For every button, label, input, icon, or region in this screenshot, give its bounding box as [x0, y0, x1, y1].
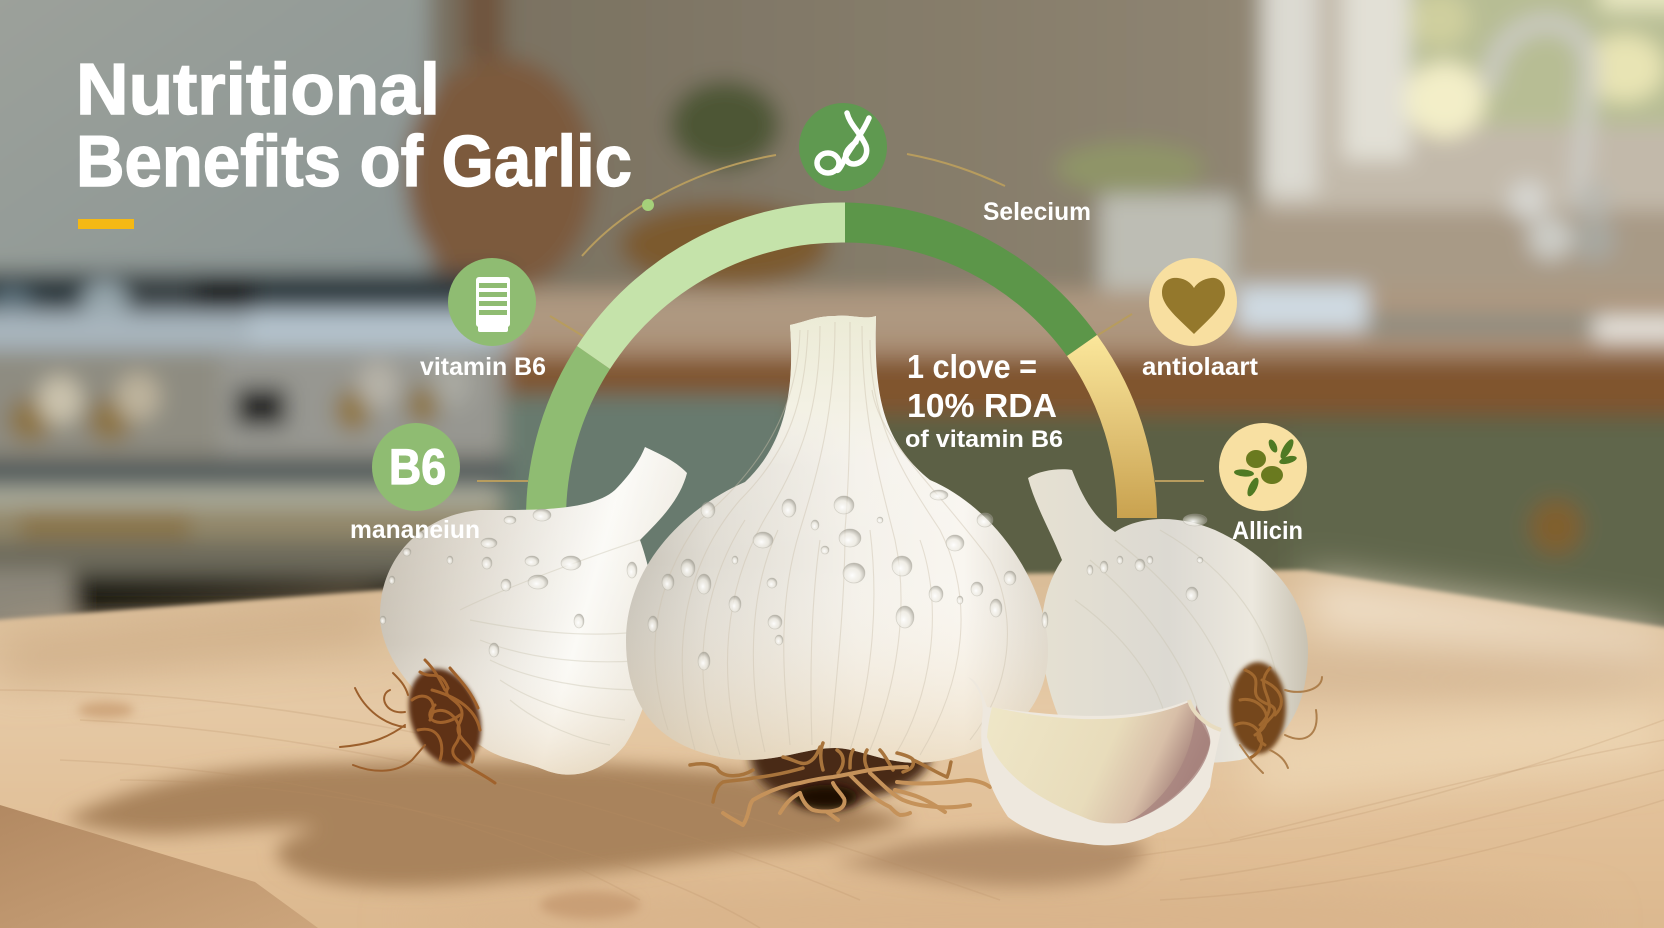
- garlic bulb: left: [340, 447, 687, 783]
- title: [76, 50, 632, 202]
- label: vitamin B6: vitamin B6: [420, 353, 546, 381]
- table shadows: [64, 761, 1146, 888]
- roots: centre bulb: [690, 743, 990, 825]
- icon: B6 badge: [372, 423, 460, 511]
- connector lines: [477, 154, 1204, 481]
- icon: allicin leaves: [1219, 423, 1307, 511]
- garlic bulb: right: [1028, 469, 1322, 773]
- label: antiolaart: antiolaart: [1142, 353, 1259, 381]
- title: Nutritional: [76, 50, 440, 130]
- label: mananeiun: mananeiun: [350, 516, 480, 544]
- garlic bulb: centre: [626, 316, 1048, 825]
- garlic clove: [968, 677, 1221, 845]
- label: Selecium: Selecium: [983, 198, 1091, 226]
- arc segment: dark green: [845, 202, 1097, 356]
- icon: selenium knot: [799, 103, 887, 191]
- semicircular gauge arc: [526, 202, 1157, 518]
- ribs: centre bulb: [655, 322, 1007, 755]
- icon: vitamin B6 tablets: [448, 258, 536, 346]
- callout: 1 clove = 10% RDA of vitamin B6: 10% RDA: [907, 387, 1057, 424]
- arc segment: green left: [526, 346, 610, 518]
- label: Allicin: Allicin: [1232, 517, 1303, 545]
- icon: heart: [1149, 258, 1237, 346]
- water droplets on garlic: [380, 490, 1207, 670]
- roots: right bulb: [1230, 662, 1322, 773]
- roots: left bulb: [340, 658, 495, 783]
- icon: B6 badge: B6: [389, 439, 446, 495]
- arc segment: light green: [577, 202, 845, 369]
- title accent bar: [78, 219, 134, 229]
- callout: 1 clove = 10% RDA of vitamin B6: of vitamin B6: [905, 426, 1063, 453]
- title: Benefits of Garlic: [76, 122, 632, 202]
- callout: 1 clove = 10% RDA of vitamin B6: 1 clove =: [907, 348, 1037, 385]
- wooden table: [0, 570, 1664, 928]
- arc segment: gold: [1067, 335, 1157, 518]
- callout: 1 clove = 10% RDA of vitamin B6: [905, 348, 1063, 453]
